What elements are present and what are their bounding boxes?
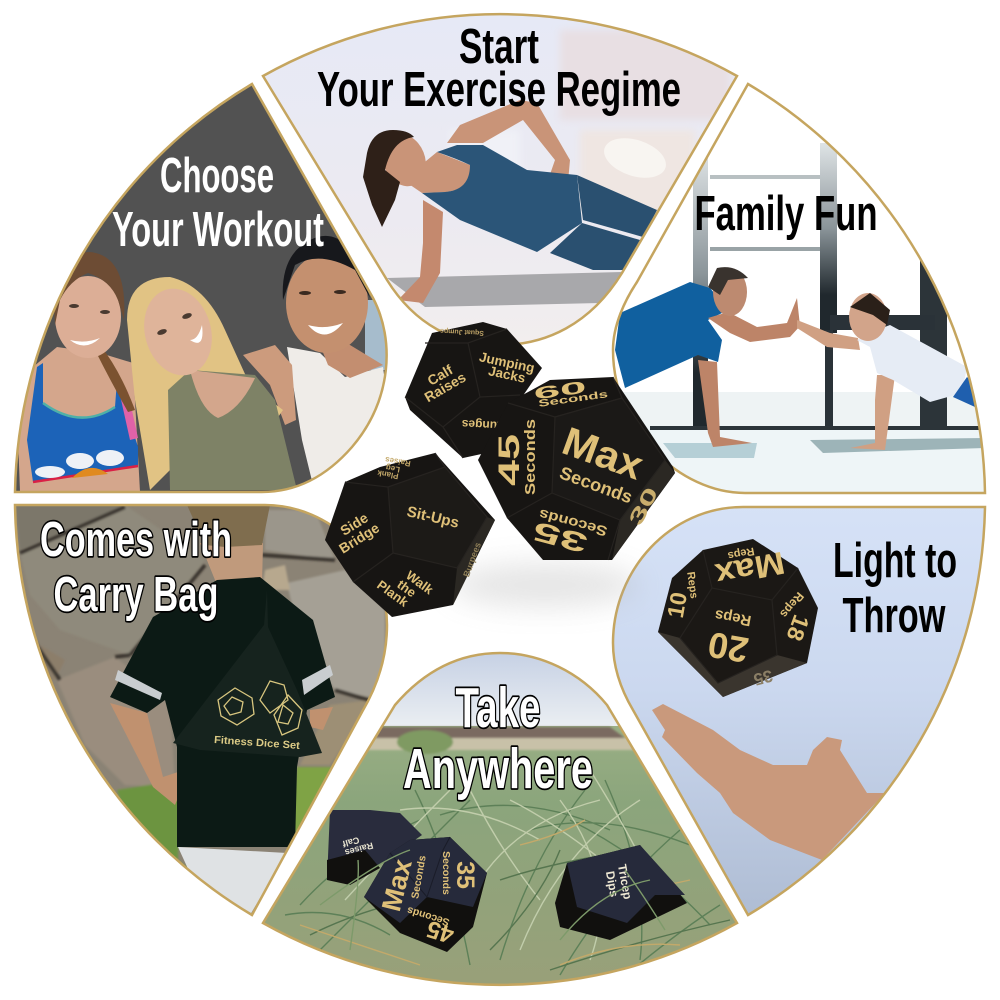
icon: hand xyxy=(652,704,885,860)
die: thrown: 18 xyxy=(781,612,815,645)
die: max seconds: Seconds xyxy=(409,854,429,900)
die: calf raises: Raises xyxy=(344,840,374,858)
icon: carry bag xyxy=(173,590,322,757)
die: sit-ups: Sit-Ups xyxy=(405,503,461,532)
die: max seconds: Seconds xyxy=(405,904,451,928)
heading: take: Take xyxy=(456,676,540,740)
panel: family fun xyxy=(605,80,990,500)
die: jumping jacks xyxy=(405,322,542,458)
heading: comes with: Comes with xyxy=(40,513,232,567)
die: max seconds: Max xyxy=(557,419,649,489)
die: jumping jacks: Raises xyxy=(421,369,469,405)
die: thrown: Reps xyxy=(777,589,807,621)
heading: your workout: Your Workout xyxy=(112,203,324,257)
die: jumping jacks: Calf xyxy=(425,361,456,389)
heading: family fun: Family Fun xyxy=(694,187,878,241)
die: max seconds: Seconds xyxy=(557,463,635,507)
panel: take anywhere xyxy=(260,650,740,990)
heading: anywhere: Anywhere xyxy=(403,737,593,801)
icon: carry bag: Fitness Dice Set xyxy=(214,734,301,752)
die: thrown: Reps xyxy=(714,606,753,629)
die: tricep dips: Tricep xyxy=(615,863,635,900)
figure: father xyxy=(615,267,800,447)
panel: choose your workout xyxy=(10,80,395,500)
heading: your exercise regime: Your Exercise Regime xyxy=(317,63,681,117)
figure: boy xyxy=(797,293,990,450)
die: sit-ups: Side xyxy=(337,509,371,539)
die: sit-ups: Walk xyxy=(403,568,437,598)
die: max seconds: 60 xyxy=(533,377,588,404)
die: max seconds xyxy=(478,377,675,560)
die: sit-ups xyxy=(325,453,495,617)
figure: man right xyxy=(283,236,390,485)
shadow under dice xyxy=(450,563,640,607)
panel: comes with carry bag xyxy=(10,500,390,920)
die: max seconds: Seconds xyxy=(522,419,539,495)
die: max seconds: 35 xyxy=(530,515,591,559)
die: sit-ups: Leg xyxy=(385,463,401,474)
die: max seconds: Seconds xyxy=(537,506,609,540)
die: sit-ups: Plank xyxy=(374,577,412,610)
die: calf raises xyxy=(327,810,422,885)
die: sit-ups: Bridge xyxy=(336,519,382,557)
die: sit-ups: Plank xyxy=(376,468,399,481)
die: tricep dips xyxy=(555,845,687,940)
die: max seconds: 45 xyxy=(493,434,526,486)
die: max seconds: Max xyxy=(376,856,418,914)
figure: blonde woman xyxy=(127,277,297,490)
die: thrown: 10 xyxy=(662,590,692,620)
die: tricep dips: Dips xyxy=(603,870,621,898)
die: thrown xyxy=(658,539,818,697)
figure: woman in side plank xyxy=(363,100,657,303)
die: thrown: Max xyxy=(712,545,788,593)
die: jumping jacks: Lunges xyxy=(461,417,505,433)
die: jumping jacks: Jumping xyxy=(478,349,536,376)
heading: carry bag: Carry Bag xyxy=(54,568,218,622)
die: sit-ups: the xyxy=(394,577,419,600)
die: thrown: Reps xyxy=(684,571,700,599)
die: max seconds: 35 xyxy=(451,861,479,889)
die: jumping jacks: Jacks xyxy=(487,363,527,386)
die: sit-ups: Burpees xyxy=(461,541,483,578)
panel: start your exercise regime xyxy=(255,10,745,350)
die: jumping jacks: Squat Jumps xyxy=(440,327,484,336)
die: max seconds: Seconds xyxy=(440,851,452,895)
heading: throw: Throw xyxy=(842,589,946,643)
die: max seconds: 30 xyxy=(625,484,663,529)
die: calf raises: Calf xyxy=(340,835,360,849)
heading: start: Start xyxy=(459,20,539,74)
die: thrown: Reps xyxy=(727,545,755,561)
figure: woman left xyxy=(18,252,140,492)
heading: choose: Choose xyxy=(160,149,274,203)
panel: light to throw xyxy=(605,500,990,920)
die: max seconds xyxy=(364,837,487,952)
figure: boy with bag xyxy=(110,505,335,915)
die: sit-ups: Raises xyxy=(384,455,411,468)
die: max seconds: Seconds xyxy=(538,389,609,410)
die: max seconds: 45 xyxy=(424,915,457,948)
die: thrown: 35 xyxy=(752,666,775,689)
die: thrown: 20 xyxy=(705,624,751,671)
